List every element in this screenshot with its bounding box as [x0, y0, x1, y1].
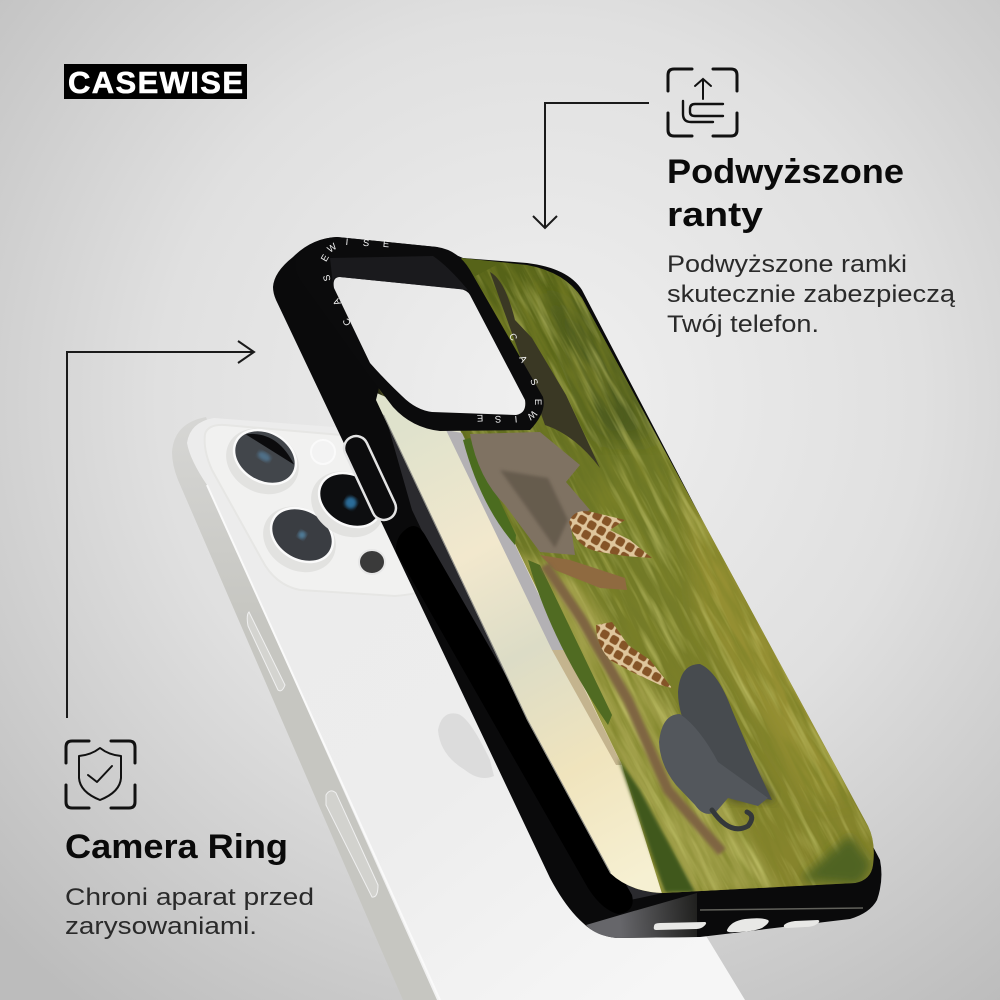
ring lettering upper: S [362, 238, 370, 249]
sensor [359, 550, 385, 574]
elephant shadow [726, 754, 778, 806]
text: raised edges description [667, 251, 956, 338]
ring lettering lower: A [516, 354, 529, 365]
text: camera ring description [65, 884, 314, 940]
side button lower [326, 791, 378, 897]
ring lettering upper: C [341, 316, 354, 327]
ring lettering lower: W [525, 408, 539, 422]
icon: shield [66, 741, 135, 808]
dark green bush mid [528, 560, 612, 725]
phone side edge [172, 417, 440, 1000]
apple logo [438, 713, 494, 778]
ring lettering upper: S [321, 273, 334, 282]
herd chain [545, 565, 722, 852]
heading: raised edges [667, 153, 904, 234]
text: camera ring description: Chroni aparat przed [65, 884, 314, 911]
heading: raised edges: ranty [667, 196, 763, 234]
lens middle [299, 458, 396, 550]
ring lettering upper: E [319, 253, 332, 264]
elephant lower [659, 714, 768, 814]
heading: camera ring: Camera Ring [65, 828, 288, 866]
ring lettering lower: E [532, 399, 543, 405]
bottom cutout left [654, 922, 706, 930]
ring lettering lower: S [527, 377, 540, 387]
large animal shading [500, 470, 568, 548]
ring lettering upper: E [382, 239, 390, 250]
bottom gloss rim [700, 908, 863, 910]
side button upper [247, 612, 285, 691]
dark green bush bottom [618, 758, 695, 892]
horizon grey band [446, 430, 565, 650]
grass bright band [680, 470, 860, 800]
icon: raised edges [668, 69, 737, 136]
dark green bush top [463, 438, 516, 545]
white phone [172, 415, 745, 1000]
ring lettering upper: A [331, 296, 344, 307]
case artwork [376, 258, 874, 893]
grass field [460, 258, 874, 893]
body edge highlight [207, 485, 440, 1000]
elephant upper [678, 664, 772, 800]
logo: CASEWISE: CASEWISE [68, 65, 243, 100]
case band inner dark grey [385, 415, 663, 900]
dark silhouette behind ring [490, 272, 600, 468]
sky [370, 390, 664, 900]
bottom cutout middle [727, 918, 769, 932]
arrow: camera ring [67, 341, 254, 718]
ring lettering upper [319, 237, 390, 327]
grass texture dark [378, 262, 874, 891]
text: camera ring description: zarysowaniami. [65, 913, 257, 940]
elephant trunk [712, 810, 752, 829]
sand band [552, 650, 622, 765]
giraffe lower [596, 622, 672, 688]
ring lettering upper: I [345, 237, 349, 248]
case frame [273, 237, 881, 938]
phone body [187, 418, 745, 1000]
ring lettering lower: I [514, 413, 518, 424]
side slot [396, 526, 633, 914]
heading: raised edges: Podwyższone [667, 153, 904, 191]
text: raised edges description: Podwyższone ramki [667, 251, 907, 278]
ring lettering upper: W [325, 241, 339, 255]
ring lettering lower: S [495, 413, 501, 424]
flash [311, 440, 335, 464]
ring lettering lower: E [477, 412, 483, 423]
large animal [470, 432, 590, 555]
lens top [214, 415, 311, 507]
black case [273, 237, 881, 938]
ring body [295, 237, 544, 431]
sky left edge [383, 415, 610, 873]
ring inner wall [330, 256, 468, 290]
text: raised edges description: Twój telefon. [667, 311, 819, 338]
text: raised edges description: skutecznie zabezpieczą [667, 281, 956, 308]
arrow: raised edges [533, 103, 649, 228]
volume button [340, 432, 400, 524]
camera ring [295, 237, 544, 431]
grass blades corner [800, 835, 872, 885]
bottom cutout right [784, 920, 819, 928]
giraffe leg group [540, 555, 627, 590]
camera bump [205, 425, 420, 596]
ring opening [334, 277, 525, 415]
grass texture light [379, 262, 872, 893]
lens bottom [251, 493, 348, 585]
ring lettering lower: C [506, 332, 519, 343]
bottom translucent strip [586, 893, 697, 938]
ring lettering lower [477, 332, 543, 424]
giraffe upper [569, 511, 652, 558]
khaki ground [510, 550, 780, 894]
grass dark patch upper [553, 306, 654, 446]
